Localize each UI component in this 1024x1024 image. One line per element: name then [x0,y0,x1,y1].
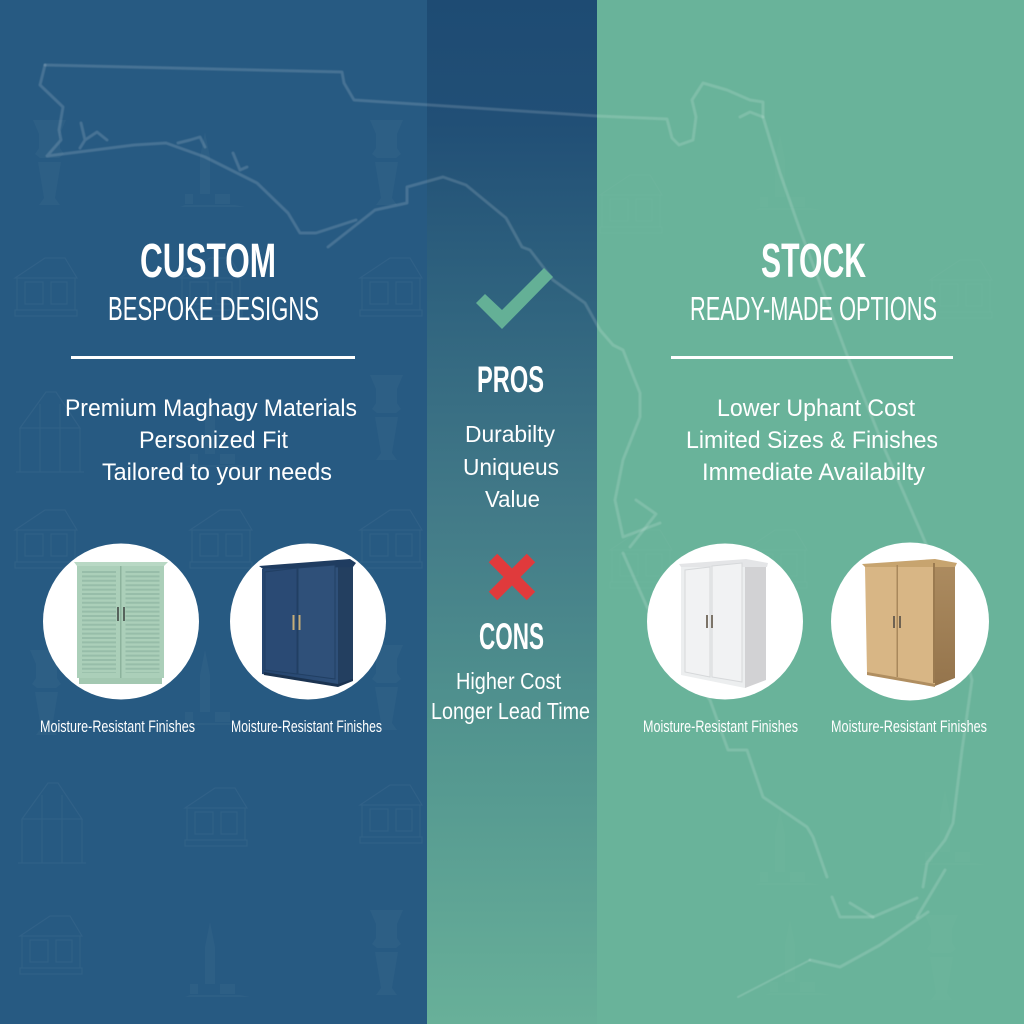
caption: navy cabinet: Moisture-Resistant Finishes [231,717,382,736]
subheading: bespoke designs: BESPOKE DESIGNS [108,290,319,327]
pros list: Uniqueus [463,454,559,480]
feature list: custom: Premium Maghagy Materials [65,395,357,422]
icon: navy cabinet [230,544,386,700]
faint architectural icon pattern, right panel [600,135,992,1000]
icon: check mark [476,268,553,329]
feature list: stock: Limited Sizes & Finishes [686,427,938,454]
icon: red cross [493,558,531,596]
heading: cons: CONS [479,616,544,657]
feature list: stock: Lower Uphant Cost [717,395,915,422]
divider: custom [71,356,355,359]
pros list [463,421,559,512]
cons list [431,668,590,724]
panel: stock [643,235,989,736]
heading: stock: STOCK [761,235,866,288]
caption: white cabinet: Moisture-Resistant Finishes [643,717,798,736]
panel: pros and cons [431,268,590,724]
divider: stock [671,356,953,359]
icon: green louvered cabinet [43,544,199,700]
heading: custom: CUSTOM [140,235,276,288]
feature list: custom [65,395,357,486]
feature list: stock [686,395,938,486]
pros list: Durabilty [465,421,555,447]
heading: pros: PROS [477,359,544,400]
feature list: stock: Immediate Availabilty [702,459,925,486]
icon: white cabinet [647,544,803,700]
cons list: Higher Cost [456,668,562,694]
faint architectural icon pattern, left panel [15,120,422,997]
pros list: Value [485,486,540,512]
icon: oak cabinet [831,542,989,700]
cons list: Longer Lead Time [431,698,590,724]
caption: green cabinet: Moisture-Resistant Finishes [40,717,195,736]
feature list: custom: Tailored to your needs [102,459,332,486]
feature list: custom: Personized Fit [139,427,288,454]
panel: custom [40,235,386,736]
